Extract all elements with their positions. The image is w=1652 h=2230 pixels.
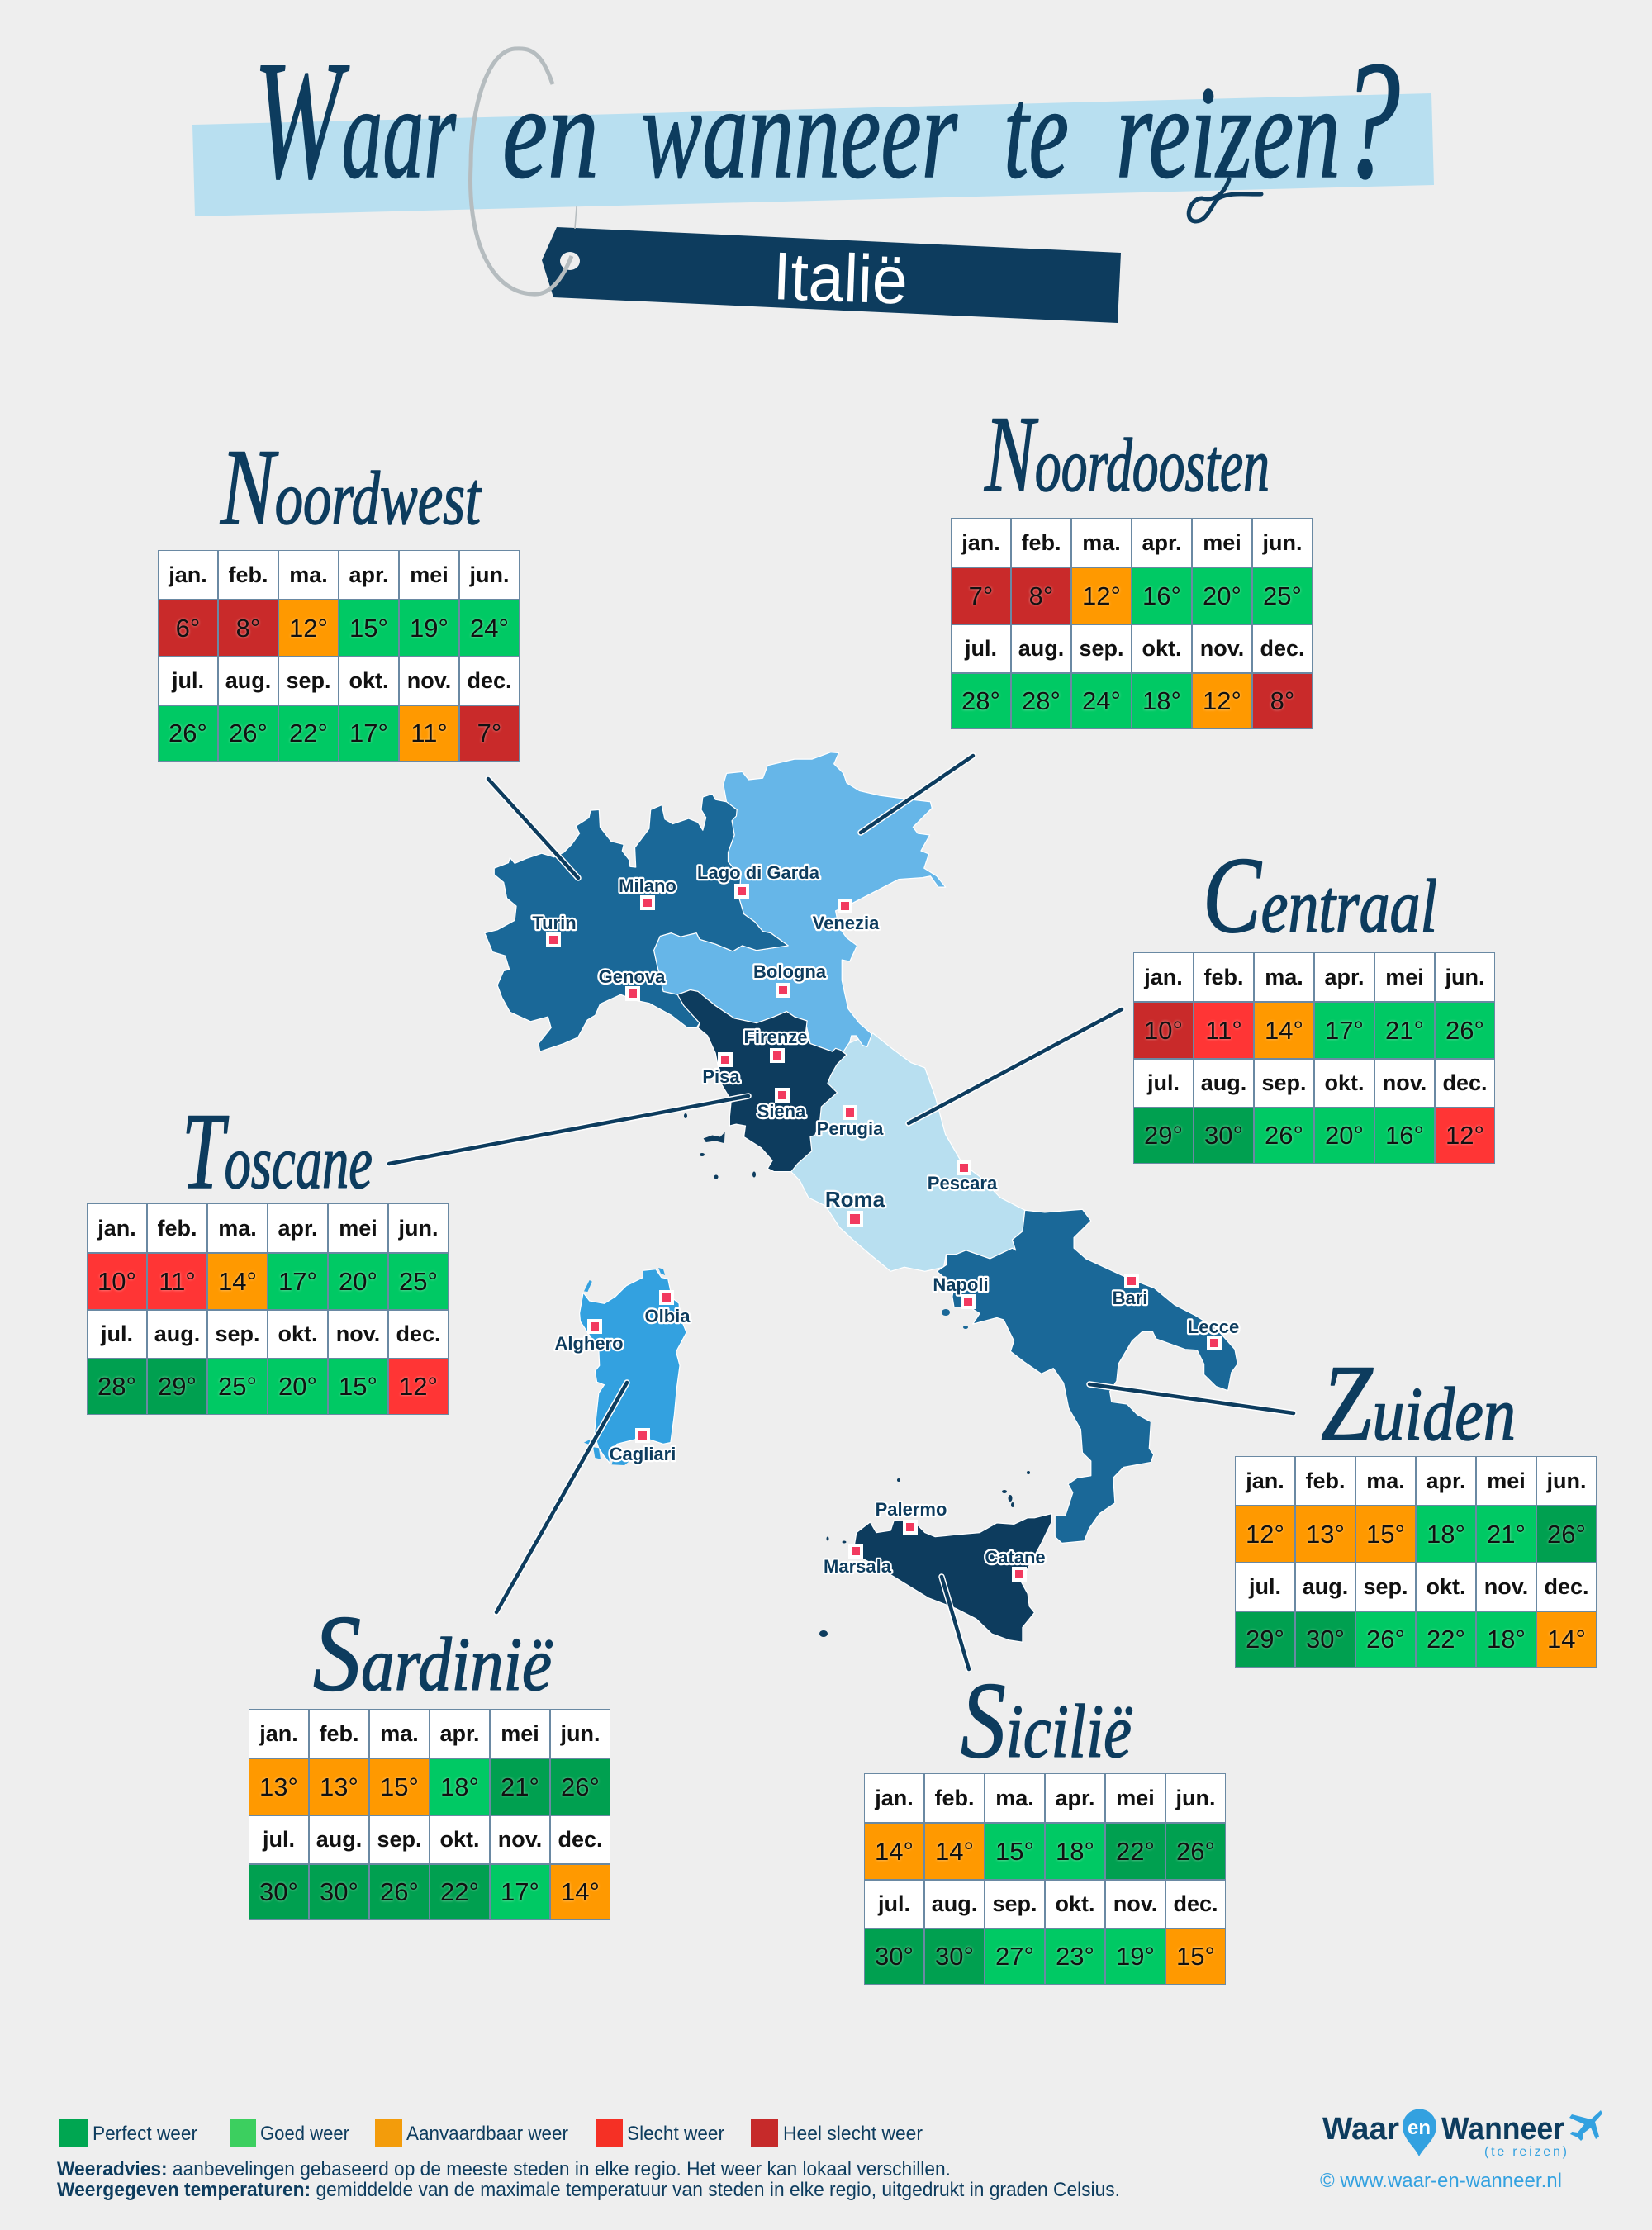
- panel: Toscane table: okt.: [278, 1321, 317, 1346]
- legend: Perfect weer: [93, 2123, 197, 2145]
- panel: Zuiden table: 14°: [1547, 1625, 1586, 1654]
- panel: Noordwest table: feb.: [228, 562, 268, 586]
- legend: Slecht weer: [627, 2123, 724, 2145]
- region: Toscane: [677, 990, 847, 1179]
- panel: Noordoosten table: mei: [1203, 530, 1241, 555]
- panel: Sicilië table: 14°: [935, 1837, 974, 1865]
- panel: Centraal table: 11°: [1205, 1016, 1242, 1044]
- panel: Sardinië table: 18°: [440, 1772, 479, 1801]
- heading: Zuiden: Zuiden: [1321, 1342, 1516, 1464]
- panel: Toscane table: feb.: [157, 1216, 197, 1241]
- city labels: Turin: [532, 913, 577, 933]
- country tag: Italië: [771, 239, 909, 319]
- panel: Noordoosten table: 8°: [1029, 581, 1053, 610]
- panel: Sicilië table: jan.: [875, 1786, 914, 1810]
- logo: Waar: [1322, 2112, 1399, 2147]
- panel: Sicilië table: 19°: [1116, 1942, 1155, 1971]
- panel: Sicilië table: 22°: [1116, 1837, 1155, 1865]
- panel: Sicilië table: 26°: [1176, 1837, 1215, 1865]
- panel: Noordoosten table: nov.: [1200, 636, 1244, 661]
- panel: Centraal table: dec.: [1442, 1070, 1488, 1095]
- panel: Toscane table: apr.: [278, 1216, 318, 1241]
- panel: Sicilië table: 27°: [995, 1942, 1034, 1971]
- city labels: Perugia: [817, 1118, 884, 1139]
- panel: Zuiden table: 18°: [1487, 1625, 1526, 1654]
- panel: Noordoosten table: apr.: [1142, 530, 1182, 555]
- panel: Noordwest table: 12°: [289, 613, 328, 643]
- panel: Centraal table: apr.: [1324, 965, 1365, 989]
- panel: Noordwest table: apr.: [349, 562, 389, 586]
- title: [254, 26, 1400, 221]
- panel: Zuiden table: 12°: [1246, 1520, 1284, 1548]
- panel: Toscane table: 28°: [97, 1372, 136, 1401]
- city labels: Napoli: [933, 1274, 989, 1295]
- panel: Centraal table: jan.: [1144, 965, 1183, 989]
- panel: Zuiden table: 26°: [1366, 1625, 1405, 1654]
- panel: Zuiden table: sep.: [1363, 1574, 1408, 1599]
- region: Centraal: [777, 1033, 1025, 1271]
- panel: Zuiden table: 18°: [1427, 1520, 1465, 1548]
- panel: Zuiden table: 22°: [1427, 1625, 1465, 1654]
- panel: Toscane table: jan.: [97, 1216, 136, 1241]
- panel: Toscane table: ma.: [218, 1216, 257, 1241]
- title: en: [502, 59, 599, 206]
- panel: Sicilië table: apr.: [1055, 1786, 1095, 1810]
- panel: Noordoosten table: ma.: [1082, 530, 1121, 555]
- panel: Centraal table: 10°: [1144, 1016, 1183, 1044]
- panel: Noordoosten table: 28°: [961, 686, 1000, 715]
- panel: Zuiden table: 30°: [1306, 1625, 1345, 1654]
- panel: Zuiden table: aug.: [1303, 1574, 1348, 1599]
- panel: Noordoosten table: 25°: [1263, 581, 1302, 610]
- panel: Noordwest table: nov.: [407, 668, 451, 693]
- panel: Toscane table: 14°: [218, 1267, 257, 1295]
- panel: Centraal table: 20°: [1325, 1121, 1364, 1150]
- panel: Sardinië table: jun.: [560, 1721, 600, 1746]
- panel: Centraal table: 26°: [1446, 1016, 1484, 1044]
- logo: © www.waar-en-wanneer.nl: [1320, 2170, 1562, 2192]
- logo: Wanneer: [1441, 2112, 1564, 2147]
- title: te: [1004, 59, 1069, 206]
- panel: Noordwest table: 8°: [236, 613, 260, 643]
- city labels: Bologna: [753, 961, 827, 982]
- panel: Zuiden table: 21°: [1487, 1520, 1526, 1548]
- panel: Sardinië table: 15°: [380, 1772, 419, 1801]
- panel: Toscane table: jul.: [101, 1321, 133, 1346]
- panel: Sicilië table: 30°: [935, 1942, 974, 1971]
- panel: Sardinië table: jan.: [259, 1721, 298, 1746]
- city labels: Roma: [825, 1187, 885, 1212]
- panel: Noordwest table: [158, 550, 520, 762]
- panel: Toscane table: [87, 1203, 449, 1415]
- panel: Noordoosten table: 20°: [1203, 581, 1241, 610]
- panel: Sardinië table: 14°: [561, 1877, 600, 1906]
- panel: Zuiden table: nov.: [1484, 1574, 1528, 1599]
- panel: Zuiden table: 15°: [1366, 1520, 1405, 1548]
- panel: Noordwest table: 7°: [477, 719, 501, 747]
- panel: Sardinië table: 17°: [501, 1877, 539, 1906]
- panel: Sicilië table: feb.: [934, 1786, 975, 1810]
- panel: Toscane table: 15°: [339, 1372, 377, 1401]
- panel: Sicilië table: okt.: [1055, 1891, 1095, 1916]
- panel: Centraal table: 16°: [1385, 1121, 1424, 1150]
- title: reizen?: [1116, 26, 1400, 214]
- panel: Centraal table: 17°: [1325, 1016, 1364, 1044]
- panel: Sardinië table: apr.: [439, 1721, 480, 1746]
- panel: Centraal table: 29°: [1144, 1121, 1183, 1150]
- panel: Noordwest table: mei: [410, 562, 449, 586]
- panel: Centraal table: 14°: [1265, 1016, 1303, 1044]
- city labels: Marsala: [824, 1556, 892, 1577]
- heading: Sicilië: Sicilië: [961, 1659, 1132, 1781]
- city labels: Bari: [1113, 1288, 1147, 1308]
- panel: Noordoosten table: dec.: [1260, 636, 1305, 661]
- panel: Sardinië table: nov.: [498, 1827, 542, 1852]
- panel: Toscane table: aug.: [154, 1321, 200, 1346]
- panel: Toscane table: 25°: [218, 1372, 257, 1401]
- panel: Centraal table: 26°: [1265, 1121, 1303, 1150]
- panel: Zuiden table: apr.: [1426, 1468, 1466, 1493]
- panel: Zuiden table: 26°: [1547, 1520, 1586, 1548]
- panel: Noordoosten table: jun.: [1262, 530, 1302, 555]
- panel: Centraal table: 21°: [1385, 1016, 1424, 1044]
- city labels: Lecce: [1188, 1317, 1239, 1337]
- panel: Centraal table: jul.: [1147, 1070, 1180, 1095]
- logo: (te reizen): [1484, 2145, 1567, 2159]
- panel: Toscane table: 11°: [159, 1267, 196, 1295]
- panel: Noordwest table: 6°: [176, 613, 200, 643]
- panel: Noordwest table: 22°: [289, 719, 328, 747]
- panel: Sicilië table: 15°: [1176, 1942, 1215, 1971]
- panel: Sicilië table: aug.: [932, 1891, 977, 1916]
- panel: Noordoosten table: jan.: [961, 530, 1000, 555]
- panel: Zuiden table: mei: [1487, 1468, 1526, 1493]
- temperature note: Weergegeven temperaturen: gemiddelde van de maximale temperatuur van steden in elke regio, uitgedrukt in graden Celsius.: [57, 2179, 1120, 2201]
- panel: Sardinië table: 22°: [440, 1877, 479, 1906]
- panel: Sicilië table: [864, 1773, 1226, 1985]
- panel: Noordwest table: sep.: [286, 668, 331, 693]
- city labels: Olbia: [644, 1306, 691, 1326]
- heading: Noordoosten: Noordoosten: [984, 393, 1270, 515]
- region: Noordoosten: [654, 752, 946, 1051]
- panel: Noordwest table: 19°: [410, 613, 449, 643]
- panel: Noordwest table: dec.: [467, 668, 512, 693]
- panel: Noordoosten table: aug.: [1018, 636, 1064, 661]
- panel: Noordwest table: jul.: [172, 668, 204, 693]
- panel: Sardinië table: 13°: [320, 1772, 358, 1801]
- panel: Sardinië table: 26°: [380, 1877, 419, 1906]
- panel: Zuiden table: jun.: [1546, 1468, 1586, 1493]
- panel: Sicilië table: sep.: [992, 1891, 1037, 1916]
- panel: Centraal table: 12°: [1446, 1121, 1484, 1150]
- panel: Sicilië table: 23°: [1056, 1942, 1094, 1971]
- panel: Zuiden table: 13°: [1306, 1520, 1345, 1548]
- panel: Centraal table: 30°: [1204, 1121, 1243, 1150]
- panel: Toscane table: nov.: [336, 1321, 380, 1346]
- panel: Noordoosten table: 12°: [1082, 581, 1121, 610]
- panel: Noordwest table: okt.: [349, 668, 388, 693]
- panel: Sardinië table: 26°: [561, 1772, 600, 1801]
- region: Sicilië: [819, 1471, 1051, 1642]
- panel: Noordoosten table: 12°: [1203, 686, 1241, 715]
- panel: Noordwest table: ma.: [289, 562, 328, 586]
- panel: Noordwest table: 24°: [470, 613, 509, 643]
- panel: Sardinië table: [249, 1709, 610, 1920]
- panel: Noordoosten table: 24°: [1082, 686, 1121, 715]
- city labels: Milano: [619, 875, 676, 896]
- weather advice note: Weeradvies: aanbevelingen gebaseerd op de meeste steden in elke regio. Het weer kan lokaal verschillen.: [57, 2158, 951, 2180]
- panel: Zuiden table: jan.: [1246, 1468, 1284, 1493]
- title: Waar: [254, 26, 456, 214]
- panel: Noordoosten table: 28°: [1022, 686, 1061, 715]
- panel: Toscane table: dec.: [396, 1321, 441, 1346]
- panel: Zuiden table: okt.: [1426, 1574, 1465, 1599]
- heading: Sardinië: Sardinië: [313, 1592, 553, 1714]
- legend: [59, 2118, 923, 2147]
- panel: Sardinië table: 30°: [259, 1877, 298, 1906]
- city labels: Palermo: [876, 1499, 947, 1520]
- panel: Sicilië table: 18°: [1056, 1837, 1094, 1865]
- panel: Noordoosten table: okt.: [1142, 636, 1181, 661]
- city labels: Lago di Garda: [697, 862, 820, 883]
- city labels: Pisa: [702, 1066, 740, 1087]
- panel: Centraal table: feb.: [1203, 965, 1244, 989]
- panel: Sicilië table: nov.: [1113, 1891, 1157, 1916]
- logo: [1320, 2109, 1602, 2192]
- city labels: Alghero: [554, 1333, 624, 1354]
- panel: Toscane table: 12°: [399, 1372, 438, 1401]
- panel: Zuiden table: [1235, 1456, 1597, 1668]
- panel: Centraal table: ma.: [1265, 965, 1303, 989]
- panel: Toscane table: mei: [339, 1216, 377, 1241]
- panel: Noordwest table: 26°: [229, 719, 268, 747]
- panel: Noordoosten table: [951, 518, 1313, 729]
- panel: Sardinië table: 21°: [501, 1772, 539, 1801]
- city labels: Catane: [985, 1547, 1046, 1568]
- title: wanneer: [641, 59, 958, 206]
- panel: Noordwest table: 15°: [349, 613, 388, 643]
- panel: Toscane table: sep.: [215, 1321, 260, 1346]
- region: Sardinië: [580, 1268, 686, 1465]
- panel: Noordwest table: 11°: [411, 719, 448, 747]
- panel: Sardinië table: feb.: [319, 1721, 358, 1746]
- panel: Sicilië table: 15°: [995, 1837, 1034, 1865]
- city labels: Firenze: [743, 1027, 808, 1047]
- panel: Sicilië table: ma.: [995, 1786, 1034, 1810]
- panel: Sardinië table: mei: [501, 1721, 539, 1746]
- panel: Sicilië table: mei: [1116, 1786, 1155, 1810]
- panel: Noordwest table: 26°: [169, 719, 207, 747]
- country tag: [542, 227, 1121, 323]
- panel: Zuiden table: 29°: [1246, 1625, 1284, 1654]
- panel: Zuiden table: dec.: [1544, 1574, 1589, 1599]
- panel: Toscane table: 17°: [278, 1267, 317, 1295]
- region: Zuiden: [937, 1209, 1237, 1543]
- logo: en: [1408, 2117, 1431, 2139]
- panel: Centraal table: [1133, 952, 1495, 1164]
- panel: Noordoosten table: 7°: [969, 581, 993, 610]
- panel: Zuiden table: jul.: [1249, 1574, 1281, 1599]
- panel: Toscane table: 29°: [158, 1372, 197, 1401]
- panel: Noordoosten table: jul.: [965, 636, 997, 661]
- panel: Sicilië table: jul.: [878, 1891, 910, 1916]
- legend: Heel slecht weer: [783, 2123, 923, 2145]
- panel: Sicilië table: 30°: [875, 1942, 914, 1971]
- panel: Zuiden table: ma.: [1366, 1468, 1405, 1493]
- city labels: Genova: [599, 966, 666, 987]
- panel: Sardinië table: jul.: [263, 1827, 295, 1852]
- heading: Toscane: Toscane: [182, 1090, 373, 1212]
- city labels: Pescara: [928, 1173, 998, 1193]
- panel: Toscane table: 10°: [97, 1267, 136, 1295]
- panel: Noordoosten table: 8°: [1270, 686, 1294, 715]
- region: Noordwest: [485, 794, 788, 1051]
- panel: Sardinië table: 13°: [259, 1772, 298, 1801]
- panel: Sardinië table: dec.: [558, 1827, 603, 1852]
- panel: Toscane table: 25°: [399, 1267, 438, 1295]
- panel: Toscane table: jun.: [398, 1216, 438, 1241]
- city markers: [548, 885, 1220, 1580]
- panel: Sardinië table: okt.: [439, 1827, 479, 1852]
- city labels: Venezia: [813, 913, 880, 933]
- panel: Sicilië table: dec.: [1173, 1891, 1218, 1916]
- map of Italy: [485, 752, 1237, 1642]
- panel: Noordoosten table: 16°: [1142, 581, 1181, 610]
- panel: Zuiden table: feb.: [1305, 1468, 1345, 1493]
- panel: Centraal table: okt.: [1324, 1070, 1365, 1095]
- panel: Sardinië table: aug.: [316, 1827, 362, 1852]
- tag string: [471, 49, 577, 294]
- panel: Sardinië table: sep.: [377, 1827, 422, 1852]
- legend: Aanvaardbaar weer: [406, 2123, 568, 2145]
- panel: Sicilië table: jun.: [1176, 1786, 1216, 1810]
- panel: Noordwest table: jan.: [169, 562, 207, 586]
- panel: Sardinië table: 30°: [320, 1877, 358, 1906]
- heading: Centraal: Centraal: [1203, 834, 1437, 956]
- panel: Sardinië table: ma.: [380, 1721, 419, 1746]
- legend: Goed weer: [260, 2123, 349, 2145]
- panel: Noordoosten table: sep.: [1079, 636, 1124, 661]
- panel: Noordoosten table: feb.: [1021, 530, 1061, 555]
- panel: Toscane table: 20°: [278, 1372, 317, 1401]
- panel: Centraal table: jun.: [1446, 965, 1485, 989]
- panel: Sicilië table: 14°: [875, 1837, 914, 1865]
- panel: Toscane table: 20°: [339, 1267, 377, 1295]
- panel: Noordwest table: 17°: [349, 719, 388, 747]
- panel: Centraal table: sep.: [1261, 1070, 1307, 1095]
- title banner: [192, 93, 1434, 216]
- city labels: Siena: [757, 1101, 806, 1122]
- panel: Noordwest table: jun.: [469, 562, 509, 586]
- city labels: [532, 862, 1239, 1577]
- panel: Noordwest table: aug.: [225, 668, 271, 693]
- panel: Centraal table: aug.: [1201, 1070, 1246, 1095]
- city labels: Cagliari: [610, 1444, 676, 1464]
- panel: Centraal table: nov.: [1383, 1070, 1427, 1095]
- panel: Centraal table: mei: [1385, 965, 1424, 989]
- connector lines: [389, 756, 1294, 1669]
- panel: Noordoosten table: 18°: [1142, 686, 1181, 715]
- heading: Noordwest: Noordwest: [220, 426, 482, 548]
